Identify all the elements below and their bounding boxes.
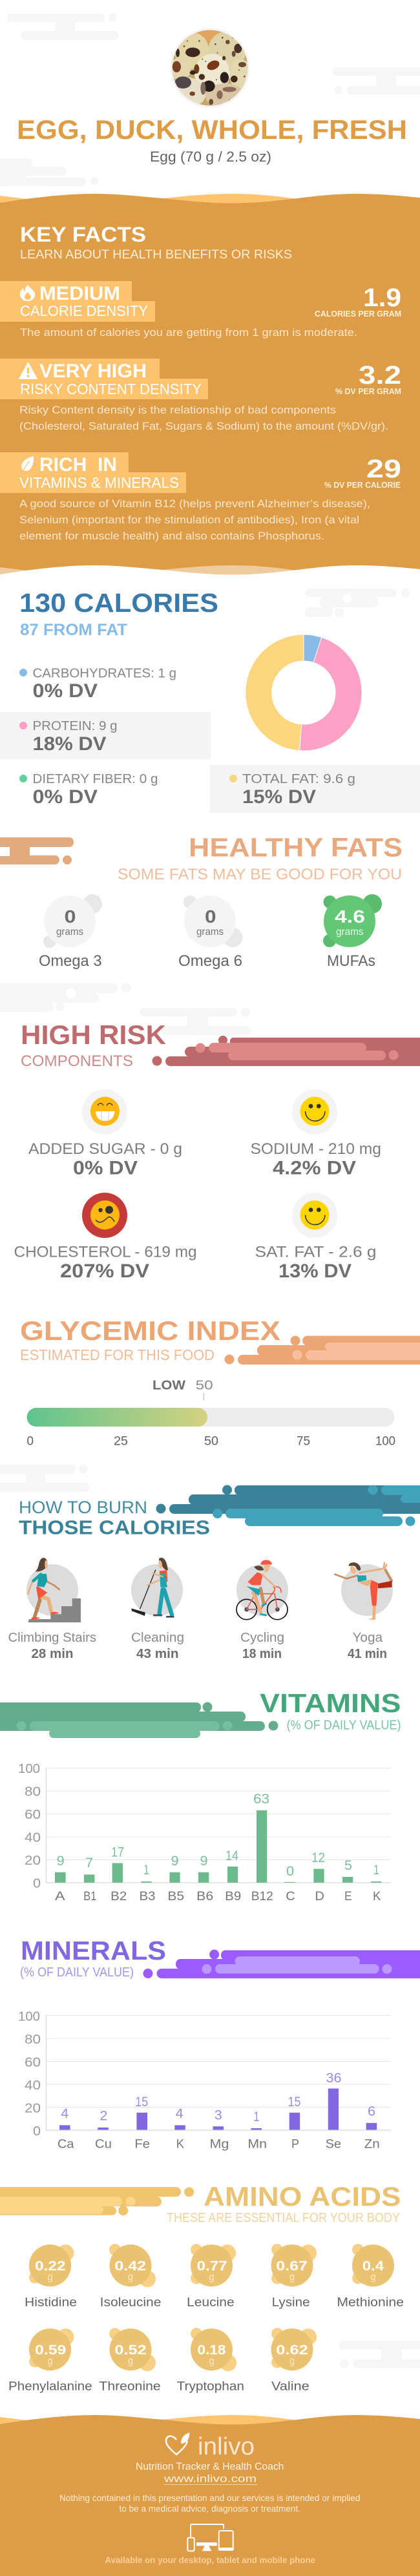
bar chart: vitamins: 80 xyxy=(25,1785,41,1799)
fact: vitamins and minerals: element for muscle health) and also contains Phosphorus. xyxy=(19,530,324,542)
activity: cycling xyxy=(236,1560,288,1661)
decorative bars xyxy=(0,2187,194,2215)
gauge value label xyxy=(152,1379,213,1400)
amino: phenylalanine: Phenylalanine xyxy=(8,2380,92,2393)
panel: minerals xyxy=(18,1936,420,2152)
illustration: woman sweeping xyxy=(131,1558,173,1617)
icon: smiling face xyxy=(300,1097,330,1126)
disclaimer: Nothing contained in this presentation and our services is intended or implied xyxy=(59,2493,361,2503)
amino: valine: g xyxy=(289,2356,295,2367)
bar chart: minerals: 2 xyxy=(100,2109,107,2124)
amino: leucine: 0.77 xyxy=(197,2258,227,2274)
website link: www.inlivo.com xyxy=(163,2474,257,2485)
bar chart: minerals: 0 xyxy=(33,2124,41,2139)
bar chart: minerals: 36 xyxy=(326,2071,341,2086)
added sugar: ADDED SUGAR - 0 g xyxy=(28,1140,182,1158)
activity: yoga: Yoga xyxy=(353,1631,383,1645)
background cloud: amino acids xyxy=(339,2341,420,2368)
gauge scale: 75 xyxy=(297,1435,310,1449)
MUFAs: 4.6 xyxy=(335,906,365,927)
amino: valine: 0.62 xyxy=(276,2342,308,2358)
panel: vitamins xyxy=(0,1688,401,1903)
bar chart: minerals: 100 xyxy=(18,2010,40,2024)
amino acids subheading: THESE ARE ESSENTIAL FOR YOUR BODY xyxy=(167,2211,400,2225)
panel: calories xyxy=(0,588,420,813)
activity: yoga xyxy=(335,1562,393,1661)
calories from fat: 87 FROM FAT xyxy=(20,621,127,639)
bar chart: vitamins xyxy=(18,1762,391,1903)
bar chart: vitamins: 0 xyxy=(33,1876,41,1890)
legend: protein xyxy=(0,712,211,760)
bar chart: vitamins: 17 xyxy=(111,1845,124,1860)
bar chart: vitamins: 63 xyxy=(253,1792,269,1806)
amino: histidine: Histidine xyxy=(25,2296,77,2309)
omega 6: 0 xyxy=(205,906,216,927)
bar chart: vitamins: 12 xyxy=(311,1850,325,1865)
fact: risky content density: 3.2 xyxy=(359,361,401,390)
availability note: Available on your desktop, tablet and mobile phone xyxy=(105,2555,315,2565)
fact: vitamins and minerals: RICH IN xyxy=(39,454,117,476)
omega 6: Omega 6 xyxy=(178,952,242,970)
activity: cycling: Cycling xyxy=(240,1631,284,1645)
activity: cycling: 18 min xyxy=(242,1647,282,1661)
disclaimer: to be a medical advice, diagnosis or treatment. xyxy=(119,2503,300,2513)
serving size: Egg (70 g / 2.5 oz) xyxy=(150,149,271,165)
omega 6 xyxy=(178,895,243,970)
activity: yoga: 41 min xyxy=(348,1647,387,1661)
amino: threonine: Threonine xyxy=(99,2380,161,2393)
amino: isoleucine: 0.42 xyxy=(114,2258,146,2274)
bar chart: vitamins: 9 xyxy=(171,1854,179,1869)
panel: amino acids xyxy=(0,2181,404,2393)
brand name: inlivo xyxy=(198,2433,255,2460)
bar chart: vitamins: B1 xyxy=(83,1890,96,1903)
background cloud: top right xyxy=(332,67,420,94)
amino: lysine: g xyxy=(289,2272,295,2283)
fact: vitamins and minerals: VITAMINS & MINERALS xyxy=(19,474,179,491)
bar chart: minerals: 4 xyxy=(176,2106,184,2121)
bar chart: minerals: K xyxy=(176,2138,184,2152)
fact: calorie density: CALORIES PER GRAM xyxy=(315,309,401,319)
decorative bars xyxy=(156,1485,420,1526)
fact: risky content density: RISKY CONTENT DENSITY xyxy=(20,381,202,397)
background cloud: top left xyxy=(7,14,119,40)
MUFAs: grams xyxy=(336,927,363,937)
bar chart: minerals: 80 xyxy=(25,2033,41,2047)
icon: smiling face xyxy=(300,1200,330,1230)
icon: inlivo logo xyxy=(166,2433,189,2455)
fact: risky content density xyxy=(0,359,401,432)
icon: sick face xyxy=(90,1200,120,1230)
activity: climbing stairs: 28 min xyxy=(31,1647,74,1661)
gauge value label: LOW xyxy=(152,1379,185,1393)
fact: vitamins and minerals: A good source of Vitamin B12 (helps prevent Alzheimer’s disease), xyxy=(19,497,370,510)
amino acids heading: AMINO ACIDS xyxy=(204,2181,401,2212)
amino: threonine: 0.52 xyxy=(114,2342,147,2358)
bar chart: minerals: Zn xyxy=(364,2138,380,2152)
activity: cleaning xyxy=(131,1558,184,1661)
bar chart: minerals: 15 xyxy=(288,2095,301,2110)
bar chart: vitamins: B6 xyxy=(196,1890,213,1903)
donut chart xyxy=(246,634,362,751)
bar chart: vitamins: 14 xyxy=(226,1848,238,1863)
amino: isoleucine xyxy=(100,2244,162,2309)
icon: warning triangle xyxy=(19,362,37,379)
bar chart: minerals: Mn xyxy=(247,2138,267,2152)
orange panel background xyxy=(0,194,420,581)
bar chart: minerals: 20 xyxy=(25,2101,41,2115)
amino: tryptophan: 0.18 xyxy=(198,2342,226,2358)
gauge scale: 100 xyxy=(375,1435,395,1449)
background cloud: burn xyxy=(0,1465,89,1492)
bar chart: minerals: Ca xyxy=(58,2138,74,2152)
amino: phenylalanine: 0.59 xyxy=(35,2342,66,2358)
amino: isoleucine: Isoleucine xyxy=(100,2296,162,2309)
amino: tryptophan: g xyxy=(209,2356,215,2367)
activity: cleaning: 43 min xyxy=(136,1647,178,1661)
vitamins subheading: (% OF DAILY VALUE) xyxy=(287,1719,401,1733)
cholesterol: CHOLESTEROL - 619 mg xyxy=(14,1243,196,1261)
high risk heading: HIGH RISK xyxy=(21,1020,166,1050)
amino: threonine xyxy=(99,2328,161,2393)
legend: protein: 18% DV xyxy=(32,733,106,755)
key facts heading: KEY FACTS xyxy=(20,223,146,246)
amino: tryptophan xyxy=(177,2328,244,2393)
fact: risky content density: Risky Content density is the relationship of bad components xyxy=(19,404,336,416)
bar chart: minerals: 60 xyxy=(25,2056,41,2070)
bar chart: vitamins: C xyxy=(286,1890,295,1903)
activity: cleaning: Cleaning xyxy=(131,1631,184,1645)
bar chart: vitamins: B2 xyxy=(110,1890,127,1903)
bar chart: vitamins: 60 xyxy=(25,1808,41,1822)
amino: leucine: g xyxy=(209,2272,215,2283)
bar chart: vitamins: 40 xyxy=(25,1831,41,1845)
bar chart: vitamins: 1 xyxy=(143,1863,149,1878)
footer wave: light layer xyxy=(0,2415,295,2436)
bar chart: minerals: 1 xyxy=(253,2110,260,2124)
gauge scale: 0 xyxy=(27,1435,34,1449)
fact: vitamins and minerals: 29 xyxy=(366,455,401,483)
bar chart: minerals: 3 xyxy=(215,2108,222,2123)
bar chart: vitamins: E xyxy=(344,1890,352,1903)
decorative bars xyxy=(225,1336,420,1365)
vitamins heading: VITAMINS xyxy=(260,1688,401,1718)
bar chart: vitamins: 0 xyxy=(286,1864,294,1879)
bar chart: minerals: Fe xyxy=(134,2138,150,2152)
fact: calorie density xyxy=(0,281,401,339)
amino: methionine: Methionine xyxy=(337,2296,404,2309)
omega 6: grams xyxy=(196,927,224,937)
calories heading: 130 CALORIES xyxy=(19,588,218,618)
tagline: Nutrition Tracker & Health Coach xyxy=(136,2462,284,2472)
footer background xyxy=(0,2415,420,2576)
amino: valine xyxy=(271,2328,317,2393)
bar chart: minerals: 6 xyxy=(368,2104,375,2119)
saturated fat: 13% DV xyxy=(278,1261,352,1282)
amino: histidine: g xyxy=(48,2272,53,2283)
food photo: duck eggs xyxy=(171,28,249,107)
amino: tryptophan: Tryptophan xyxy=(177,2380,244,2393)
bar chart: minerals: Se xyxy=(326,2138,341,2152)
fact: vitamins and minerals xyxy=(0,452,401,542)
background cloud: mid left xyxy=(0,158,98,186)
activity: climbing stairs xyxy=(8,1558,96,1661)
minerals subheading: (% OF DAILY VALUE) xyxy=(20,1965,134,1980)
MUFAs: MUFAs xyxy=(327,952,375,970)
panel: healthy fats xyxy=(0,832,403,970)
top wave: light layer xyxy=(0,194,295,213)
decorative bars xyxy=(0,837,74,864)
background cloud: high risk left xyxy=(0,983,131,1012)
icon: grinning face xyxy=(90,1097,120,1126)
fact: risky content density: (Cholesterol, Saturated Fat, Sugars & Sodium) to the amount (%DV/gr). xyxy=(19,420,388,432)
bar chart: vitamins: B9 xyxy=(225,1890,241,1903)
legend: carbohydrates: 0% DV xyxy=(32,680,98,702)
saturated fat: SAT. FAT - 2.6 g xyxy=(255,1243,376,1261)
bar chart: vitamins: 9 xyxy=(200,1854,208,1869)
bar chart: minerals: Mg xyxy=(209,2138,229,2152)
glycemic index subheading: ESTIMATED FOR THIS FOOD xyxy=(20,1346,215,1363)
legend: total fat: 15% DV xyxy=(242,786,316,808)
amino: valine: Valine xyxy=(271,2380,310,2393)
bar chart: vitamins: B12 xyxy=(251,1890,273,1903)
fact: risky content density: VERY HIGH xyxy=(39,361,147,382)
high risk subheading: COMPONENTS xyxy=(21,1052,133,1070)
bottom wave: white layer xyxy=(0,565,420,585)
amino: leucine xyxy=(187,2244,236,2309)
healthy fats heading: HEALTHY FATS xyxy=(189,832,403,862)
fact: calorie density: 1.9 xyxy=(363,284,401,312)
fact: calorie density: CALORIE DENSITY xyxy=(20,302,148,319)
cholesterol: 207% DV xyxy=(60,1261,149,1282)
MUFAs xyxy=(323,894,382,970)
omega 3: Omega 3 xyxy=(39,952,102,970)
panel: high risk xyxy=(14,1020,420,1282)
legend: carbohydrates: CARBOHYDRATES: 1 g xyxy=(32,667,176,681)
bar chart: vitamins: K xyxy=(373,1890,381,1903)
fact: vitamins and minerals: Selenium (important for the stimulation of antibodies), Iron (a vital xyxy=(19,514,359,526)
decorative bars xyxy=(0,1702,278,1738)
amino: lysine: Lysine xyxy=(272,2296,310,2309)
bar chart: minerals xyxy=(18,2010,391,2152)
legend: dietary fiber: 0% DV xyxy=(32,786,98,808)
gauge scale xyxy=(27,1435,395,1449)
amino: phenylalanine xyxy=(8,2329,92,2393)
title: EGG, DUCK, WHOLE, FRESH xyxy=(17,114,407,145)
bar chart: vitamins: 100 xyxy=(18,1762,40,1776)
bar chart: minerals: Cu xyxy=(95,2138,112,2152)
bar chart: vitamins: A xyxy=(55,1890,65,1903)
panel: how to burn those calories xyxy=(8,1485,420,1661)
sodium: 4.2% DV xyxy=(273,1158,356,1178)
legend: dietary fiber: DIETARY FIBER: 0 g xyxy=(32,772,158,786)
saturated fat xyxy=(255,1193,376,1282)
fact: calorie density: MEDIUM xyxy=(39,283,120,304)
bar chart: vitamins: 9 xyxy=(57,1854,65,1869)
bar chart: vitamins: B3 xyxy=(140,1890,155,1903)
illustration: woman in yoga pose xyxy=(335,1562,392,1620)
amino: histidine: 0.22 xyxy=(35,2258,66,2274)
amino: histidine xyxy=(25,2245,77,2309)
legend: total fat: TOTAL FAT: 9.6 g xyxy=(242,772,355,786)
burn heading: line 2: THOSE CALORIES xyxy=(19,1516,210,1539)
bar chart: vitamins: 20 xyxy=(25,1854,41,1868)
decorative bars xyxy=(143,1950,420,1978)
panel: key facts xyxy=(0,194,420,585)
bar chart: vitamins: 1 xyxy=(373,1863,379,1878)
amino: lysine: 0.67 xyxy=(276,2258,308,2274)
legend: total fat xyxy=(210,765,420,813)
bar chart: vitamins: D xyxy=(315,1890,324,1903)
bottom wave: pale layer xyxy=(0,565,295,578)
disclaimer xyxy=(59,2493,361,2513)
panel: footer xyxy=(0,2415,420,2576)
healthy fats subheading: SOME FATS MAY BE GOOD FOR YOU xyxy=(118,866,402,883)
bar chart: minerals: 4 xyxy=(61,2106,69,2121)
amino: isoleucine: g xyxy=(128,2272,133,2283)
amino: methionine xyxy=(337,2244,404,2309)
icon: devices xyxy=(187,2524,234,2551)
gauge scale: 25 xyxy=(114,1435,128,1449)
omega 3: 0 xyxy=(65,906,76,927)
bar chart: vitamins: 5 xyxy=(344,1858,352,1873)
panel: glycemic index xyxy=(20,1315,420,1449)
bar chart: minerals: 15 xyxy=(135,2095,148,2110)
added sugar: 0% DV xyxy=(73,1158,138,1178)
added sugar xyxy=(28,1089,182,1178)
bar chart: vitamins: 7 xyxy=(85,1856,93,1870)
amino: phenylalanine: g xyxy=(48,2356,53,2367)
fact: vitamins and minerals: % DV PER CALORIE xyxy=(324,480,401,490)
amino: leucine: Leucine xyxy=(187,2296,235,2309)
bar chart: minerals: P xyxy=(291,2138,299,2152)
gauge value label: 50 xyxy=(196,1379,213,1393)
illustration: woman cycling xyxy=(236,1560,288,1620)
fact: calorie density: The amount of calories you are getting from 1 gram is moderate. xyxy=(20,326,357,339)
gauge bar xyxy=(27,1408,394,1427)
decorative bars xyxy=(152,1036,420,1066)
cholesterol xyxy=(14,1193,196,1282)
burn heading: line 1: HOW TO BURN xyxy=(19,1498,147,1517)
amino: methionine: g xyxy=(371,2272,376,2283)
icon: flame xyxy=(20,285,35,301)
gauge scale: 50 xyxy=(204,1435,218,1449)
background cloud: high risk center xyxy=(140,1008,251,1035)
icon: leaf xyxy=(21,456,34,471)
sodium: SODIUM - 210 mg xyxy=(251,1140,381,1158)
omega 3 xyxy=(39,894,102,970)
amino: lysine xyxy=(271,2244,317,2309)
fact: risky content density: % DV PER GRAM xyxy=(335,386,401,396)
key facts subheading: LEARN ABOUT HEALTH BENEFITS OR RISKS xyxy=(20,248,292,262)
glycemic index heading: GLYCEMIC INDEX xyxy=(20,1315,280,1346)
bar chart: vitamins: B5 xyxy=(168,1890,184,1903)
minerals heading: MINERALS xyxy=(21,1936,166,1965)
bar chart: minerals: 40 xyxy=(25,2079,41,2093)
amino: threonine: g xyxy=(128,2356,133,2367)
legend: dietary fiber xyxy=(19,772,158,808)
sodium xyxy=(251,1089,381,1178)
omega 3: grams xyxy=(56,927,83,937)
amino: methionine: 0.4 xyxy=(362,2258,384,2274)
legend: carbohydrates xyxy=(19,667,176,702)
legend: protein: PROTEIN: 9 g xyxy=(32,719,118,733)
background cloud: calories xyxy=(305,589,410,617)
activity: climbing stairs: Climbing Stairs xyxy=(8,1631,96,1645)
illustration: woman climbing stairs xyxy=(28,1558,81,1622)
